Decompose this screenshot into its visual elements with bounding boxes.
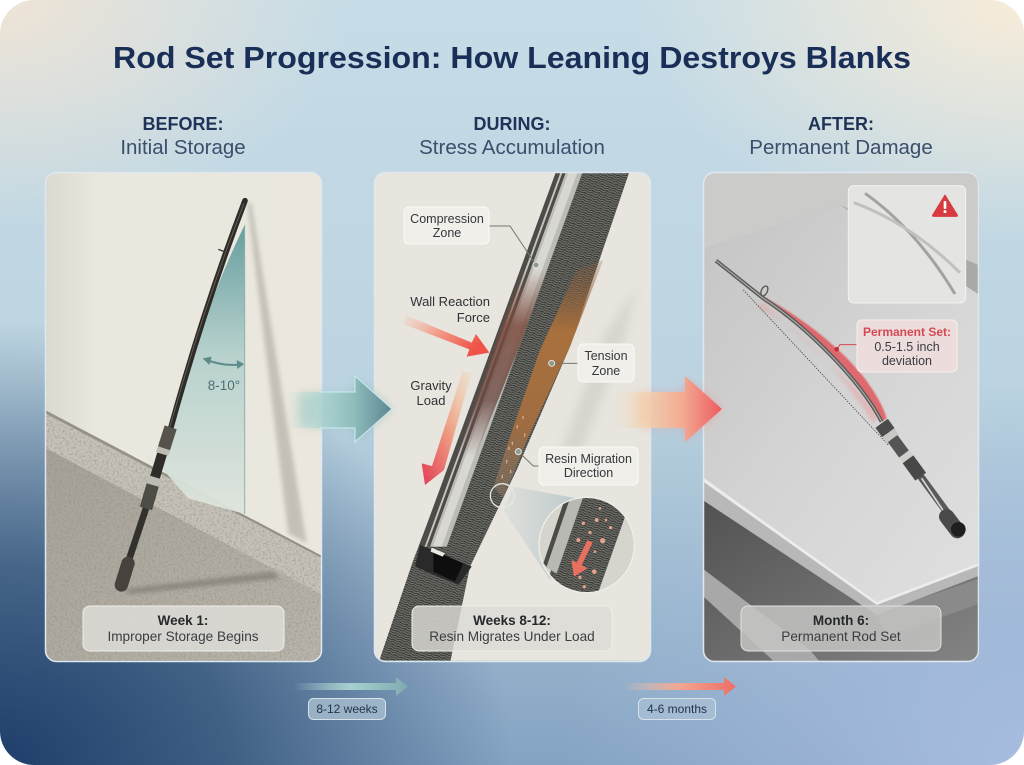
label: gravity load [410, 378, 452, 408]
heading: during [419, 114, 605, 159]
label: wall reaction force: Force [457, 310, 490, 325]
inset: rod comparison [848, 186, 966, 303]
label: compression zone: Zone [433, 226, 461, 240]
rod shadow on wall [247, 203, 307, 543]
leader lines [489, 226, 578, 466]
pill: 8-12 weeks [308, 698, 386, 720]
magnifier ring [490, 484, 514, 508]
panel: after [700, 170, 990, 670]
angle triangle [163, 225, 245, 514]
arrow: during to after [615, 376, 722, 442]
caption: month 6: Month 6: [813, 613, 869, 628]
timeline arrow: 8-12 weeks [293, 677, 408, 696]
baseboard [40, 407, 327, 597]
tension tint [493, 260, 603, 498]
silver stripe [430, 170, 583, 547]
label: resin migration: Direction [564, 466, 613, 480]
caption: weeks 8-12: Weeks 8-12: [473, 613, 551, 628]
resin particles [502, 416, 525, 478]
table top [700, 205, 990, 602]
icon: warning [932, 195, 957, 216]
caption: week 1: Improper Storage Begins [107, 629, 259, 644]
heading: during: DURING: [474, 114, 550, 134]
callout: permanent set: deviation [882, 354, 932, 368]
leader [838, 344, 856, 348]
heading: after: AFTER: [808, 114, 874, 134]
dotted reference line [743, 290, 888, 445]
label: compression zone [404, 207, 489, 244]
arrow: before to during [285, 376, 392, 442]
label: wall reaction force [410, 294, 490, 325]
arrow: gravity load [422, 372, 471, 485]
ferrule [415, 545, 472, 585]
compression tint [460, 274, 545, 452]
angle label: 8-10° [208, 378, 240, 393]
table underside [704, 501, 980, 661]
caption: weeks 8-12: Resin Migrates Under Load [429, 629, 595, 644]
pill: 4-6 months: 4-6 months [647, 702, 707, 716]
title: Rod Set Progression: How Leaning Destroys Blanks [113, 40, 911, 75]
heading: before: Initial Storage [120, 136, 246, 159]
magnifier cone [504, 487, 575, 580]
red deviation area [757, 303, 878, 423]
angle arrow [203, 357, 244, 369]
caption: month 6: Permanent Rod Set [781, 629, 901, 644]
heading: during: Stress Accumulation [419, 136, 605, 159]
heading: after [749, 114, 933, 159]
floor [40, 445, 327, 670]
panel: before [40, 170, 330, 670]
floor shadow [123, 572, 280, 594]
heading: before: BEFORE: [142, 114, 224, 134]
compression side dashes [419, 170, 567, 547]
label: gravity load: Gravity [410, 378, 452, 393]
caption: week 1: Week 1: [158, 613, 208, 628]
callout: permanent set [857, 320, 957, 372]
callout: permanent set: 0.5-1.5 inch [874, 340, 940, 354]
panel: during [370, 170, 660, 670]
table edge [704, 483, 980, 615]
caption: week 1 [83, 606, 284, 651]
label: tension zone: Zone [592, 364, 620, 378]
caption: weeks 8-12 [412, 606, 612, 651]
label: wall reaction force: Wall Reaction [410, 294, 490, 309]
rod body [378, 170, 630, 663]
callout: permanent set: Permanent Set: [863, 325, 951, 339]
label: tension zone [578, 344, 634, 382]
heading: after: Permanent Damage [749, 136, 933, 159]
arrow: wall reaction force [403, 315, 489, 357]
pill: 4-6 months [638, 698, 716, 720]
label: compression zone: Compression [410, 212, 484, 226]
pill: 8-12 weeks: 8-12 weeks [316, 702, 378, 716]
heading: before [120, 114, 246, 159]
rod [121, 201, 245, 585]
timeline arrow: 4-6 months [622, 677, 736, 696]
wall shadow [563, 302, 632, 446]
label: gravity load: Load [417, 393, 445, 408]
label: resin migration [539, 447, 638, 485]
label: resin migration: Resin Migration [545, 452, 632, 466]
magnified inset [539, 493, 634, 597]
caption: month 6 [741, 606, 941, 651]
label: tension zone: Tension [584, 349, 628, 363]
leader dots [515, 262, 555, 455]
rod [716, 261, 966, 537]
